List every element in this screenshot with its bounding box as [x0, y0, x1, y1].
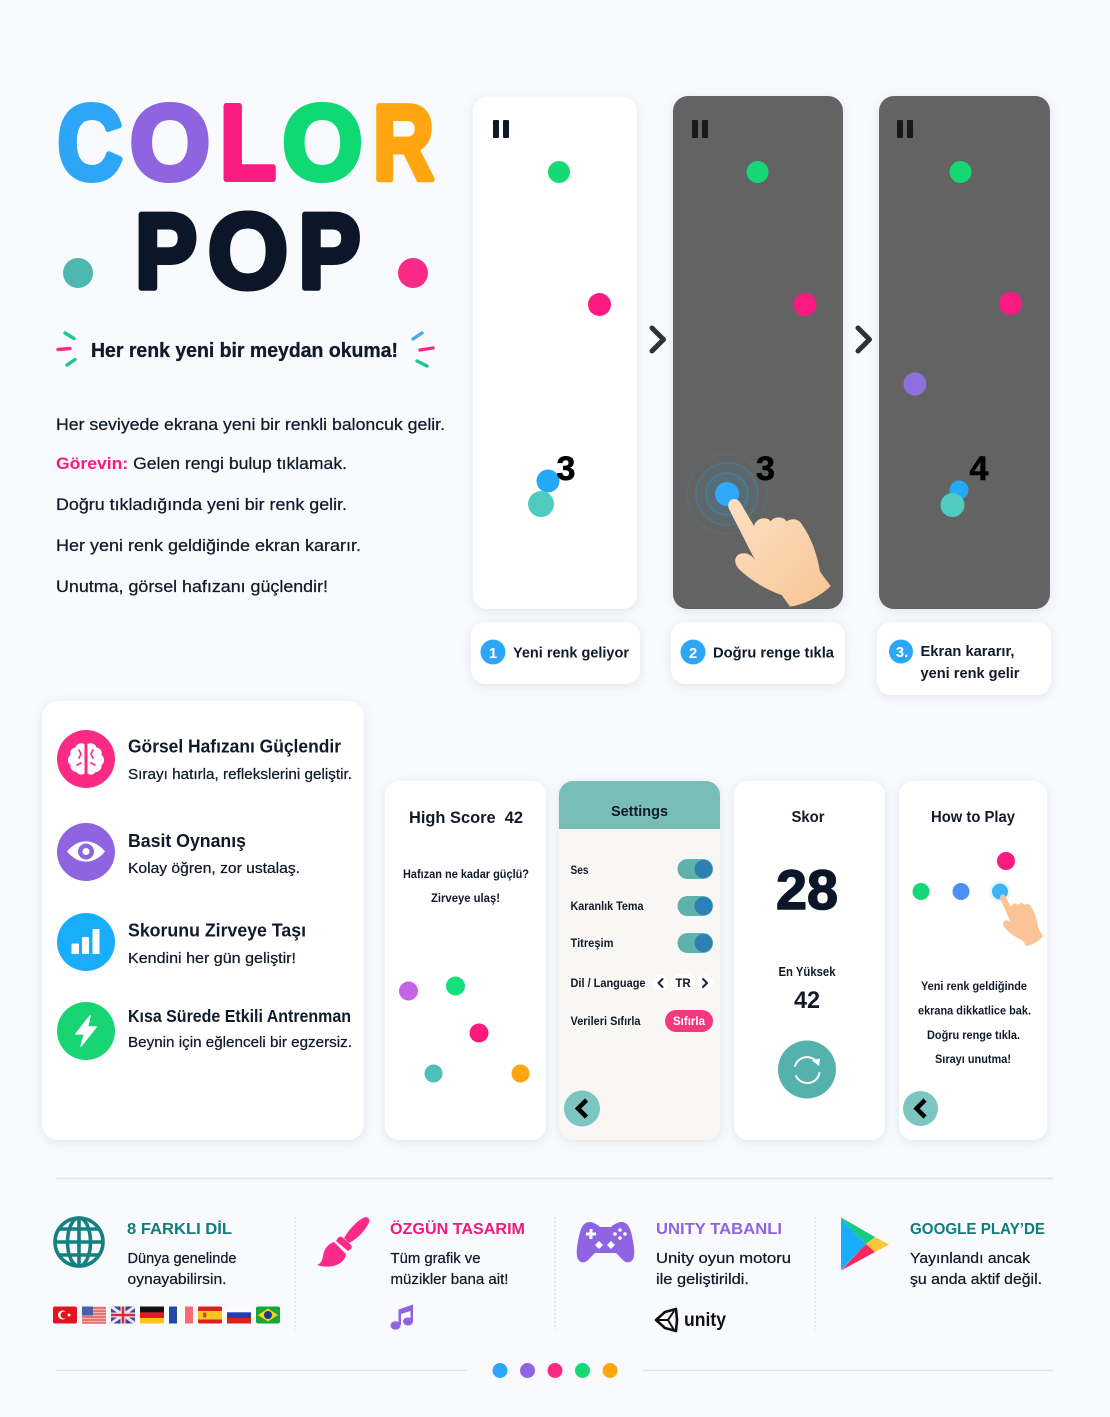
step label 3: 3. [896, 644, 908, 661]
panel: gameplay screen 2 [673, 96, 843, 609]
setting rows: Verileri Sıfırla [570, 1016, 641, 1028]
panel: gameplay screen 3 [879, 96, 1050, 609]
icon: globe [55, 1218, 103, 1266]
panel: high score screen [385, 781, 546, 1140]
pagination dots [492, 1363, 618, 1378]
benefit: high score [57, 913, 306, 971]
reset button [665, 1010, 713, 1032]
panel: score screen: 28 [776, 858, 838, 921]
intro text: Her yeni renk geldiğinde ekran kararır. [56, 536, 361, 555]
flag: UK [111, 1306, 135, 1324]
step label 1: Yeni renk geliyor [513, 644, 629, 662]
flag: USA [82, 1306, 106, 1324]
panel: how to play screen [899, 781, 1047, 1140]
title word: COLOR: R [373, 84, 434, 202]
panel: score screen [734, 781, 885, 1140]
icon: paintbrush [317, 1217, 369, 1267]
language selector [652, 974, 713, 992]
flag: Germany [140, 1306, 164, 1324]
panel: gameplay screen 2: 3 [756, 450, 775, 488]
icon: eye [67, 841, 105, 862]
tagline [58, 333, 433, 366]
feature: original design: müzikler bana ait! [390, 1271, 508, 1288]
instructions [918, 981, 1031, 1066]
feature: google play: GOOGLE PLAY’DE [910, 1221, 1045, 1238]
back button [903, 1091, 938, 1126]
logo: unity: unity [684, 1310, 726, 1331]
intro text: Her seviyede ekrana yeni bir renkli baloncuk gelir. [56, 415, 445, 434]
title word: POP: O [208, 192, 288, 310]
panel: high score screen: High Score 42 [409, 808, 523, 827]
panel: benefits [42, 701, 364, 1140]
setting rows: Titreşim [570, 938, 614, 950]
feature: languages [53, 1218, 280, 1324]
title: COLOR POP [58, 84, 434, 310]
arrow 1 [652, 328, 664, 351]
feature: unity: UNITY TABANLI [656, 1221, 782, 1238]
feature: unity [577, 1221, 791, 1331]
intro text: Unutma, görsel hafızanı güçlendir! [56, 577, 328, 596]
tagline: Her renk yeni bir meydan okuma! [91, 340, 398, 362]
feature: google play: şu anda aktif değil. [910, 1271, 1042, 1288]
icon: small hand [1000, 894, 1043, 946]
title word: COLOR: O [130, 84, 210, 202]
icon: pause [897, 120, 913, 138]
title word: COLOR: L [220, 84, 276, 202]
toggles [678, 859, 713, 953]
setting rows: Karanlık Tema [570, 901, 644, 913]
panel: gameplay screen 1: 3 [557, 450, 575, 488]
instructions: ekrana dikkatlice bak. [918, 1006, 1031, 1018]
instructions: Yeni renk geldiğinde [921, 981, 1027, 993]
panel: high score screen: Zirveye ulaş! [431, 891, 500, 905]
title word: POP [135, 192, 360, 310]
feature: languages: oynayabilirsin. [128, 1271, 226, 1288]
instructions: Sırayı unutma! [935, 1054, 1011, 1066]
decorative dot pink [398, 258, 428, 288]
intro text: Görevin: Gelen rengi bulup tıklamak. [56, 454, 347, 473]
title word: COLOR: O [282, 84, 362, 202]
flag: Spain [198, 1306, 222, 1324]
icon: bars [72, 929, 100, 954]
feature: original design: ÖZGÜN TASARIM [390, 1219, 525, 1238]
benefit: high score: Skorunu Zirveye Taşı [128, 920, 306, 940]
benefit: simple gameplay: Basit Oynanış [128, 831, 246, 851]
panel: score screen: 42 [794, 987, 820, 1014]
step label 3 [877, 622, 1051, 695]
feature: languages: Dünya genelinde [128, 1250, 236, 1267]
title word: POP: P [135, 192, 197, 310]
benefit: memory [57, 730, 352, 788]
feature: original design: Tüm grafik ve [390, 1250, 480, 1267]
benefit: simple gameplay [57, 823, 300, 881]
benefit: simple gameplay: Kolay öğren, zor ustalaş. [128, 860, 300, 877]
intro text: Doğru tıkladığında yeni bir renk gelir. [56, 495, 347, 514]
step label 3: yeni renk gelir [920, 665, 1020, 682]
feature: unity: Unity oyun motoru [656, 1250, 791, 1267]
feature: unity: ile geliştirildi. [656, 1271, 749, 1288]
intro text [56, 415, 445, 596]
step label 1: 1 [489, 645, 497, 662]
feature: original design [317, 1217, 525, 1330]
flag: Russia [227, 1306, 251, 1324]
icon: lightning [76, 1016, 96, 1046]
feature: google play [841, 1218, 1045, 1288]
back button [564, 1090, 600, 1126]
panel: gameplay screen 1 [473, 97, 637, 609]
flag: France [169, 1306, 193, 1324]
panel: settings screen [559, 781, 720, 1140]
flags [53, 1306, 280, 1324]
reset button: Sıfırla [673, 1016, 706, 1028]
benefit: memory: Görsel Hafızanı Güçlendir [128, 736, 341, 756]
feature: languages: 8 FARKLI DİL [127, 1220, 232, 1238]
benefit: memory: Sırayı hatırla, reflekslerini geliştir. [128, 766, 352, 783]
benefit: high score: Kendini her gün geliştir! [128, 950, 296, 967]
refresh button [778, 1040, 836, 1098]
step label 1 [471, 622, 640, 684]
logo: unity [656, 1309, 726, 1331]
step label 2: 2 [689, 645, 697, 662]
icon: pause [692, 120, 708, 138]
benefit: short training: Kısa Sürede Etkili Antrenman [128, 1006, 351, 1026]
icon: pointing hand [728, 499, 831, 607]
benefit: short training: Beynin için eğlenceli bir egzersiz. [128, 1034, 352, 1051]
panel: score screen: En Yüksek [778, 965, 836, 979]
step label 3: Ekran kararır, [920, 643, 1014, 660]
feature: google play: Yayınlandı ancak [910, 1250, 1031, 1267]
step label 2: Doğru renge tıkla [713, 644, 835, 662]
flag: Turkey [53, 1306, 77, 1324]
setting rows [570, 865, 646, 1028]
panel: how to play screen: How to Play [931, 809, 1015, 826]
flag: Brazil [256, 1306, 280, 1324]
title word: COLOR [58, 84, 434, 202]
title word: POP: P [298, 192, 360, 310]
instructions: Doğru renge tıkla. [927, 1030, 1020, 1042]
language selector: TR [675, 978, 691, 990]
tap ripple on blue dot [687, 454, 767, 534]
panel: gameplay screen 3: 4 [970, 450, 989, 488]
arrow 2 [858, 328, 870, 351]
icon: pause [493, 120, 509, 138]
icon: brain [68, 743, 104, 775]
icon: game controller [577, 1222, 634, 1262]
title word: COLOR: C [58, 84, 122, 202]
icon: music note [390, 1304, 413, 1330]
decorative dot teal [63, 258, 93, 288]
setting rows: Ses [570, 865, 588, 877]
icon: play logo [841, 1218, 889, 1270]
panel: high score screen: Hafızan ne kadar güçlü? [403, 867, 529, 881]
benefit: short training [57, 1002, 352, 1060]
step label 2 [671, 622, 845, 684]
setting rows: Dil / Language [570, 978, 646, 990]
panel: settings screen: Settings [611, 803, 668, 820]
panel: score screen: Skor [792, 809, 824, 826]
